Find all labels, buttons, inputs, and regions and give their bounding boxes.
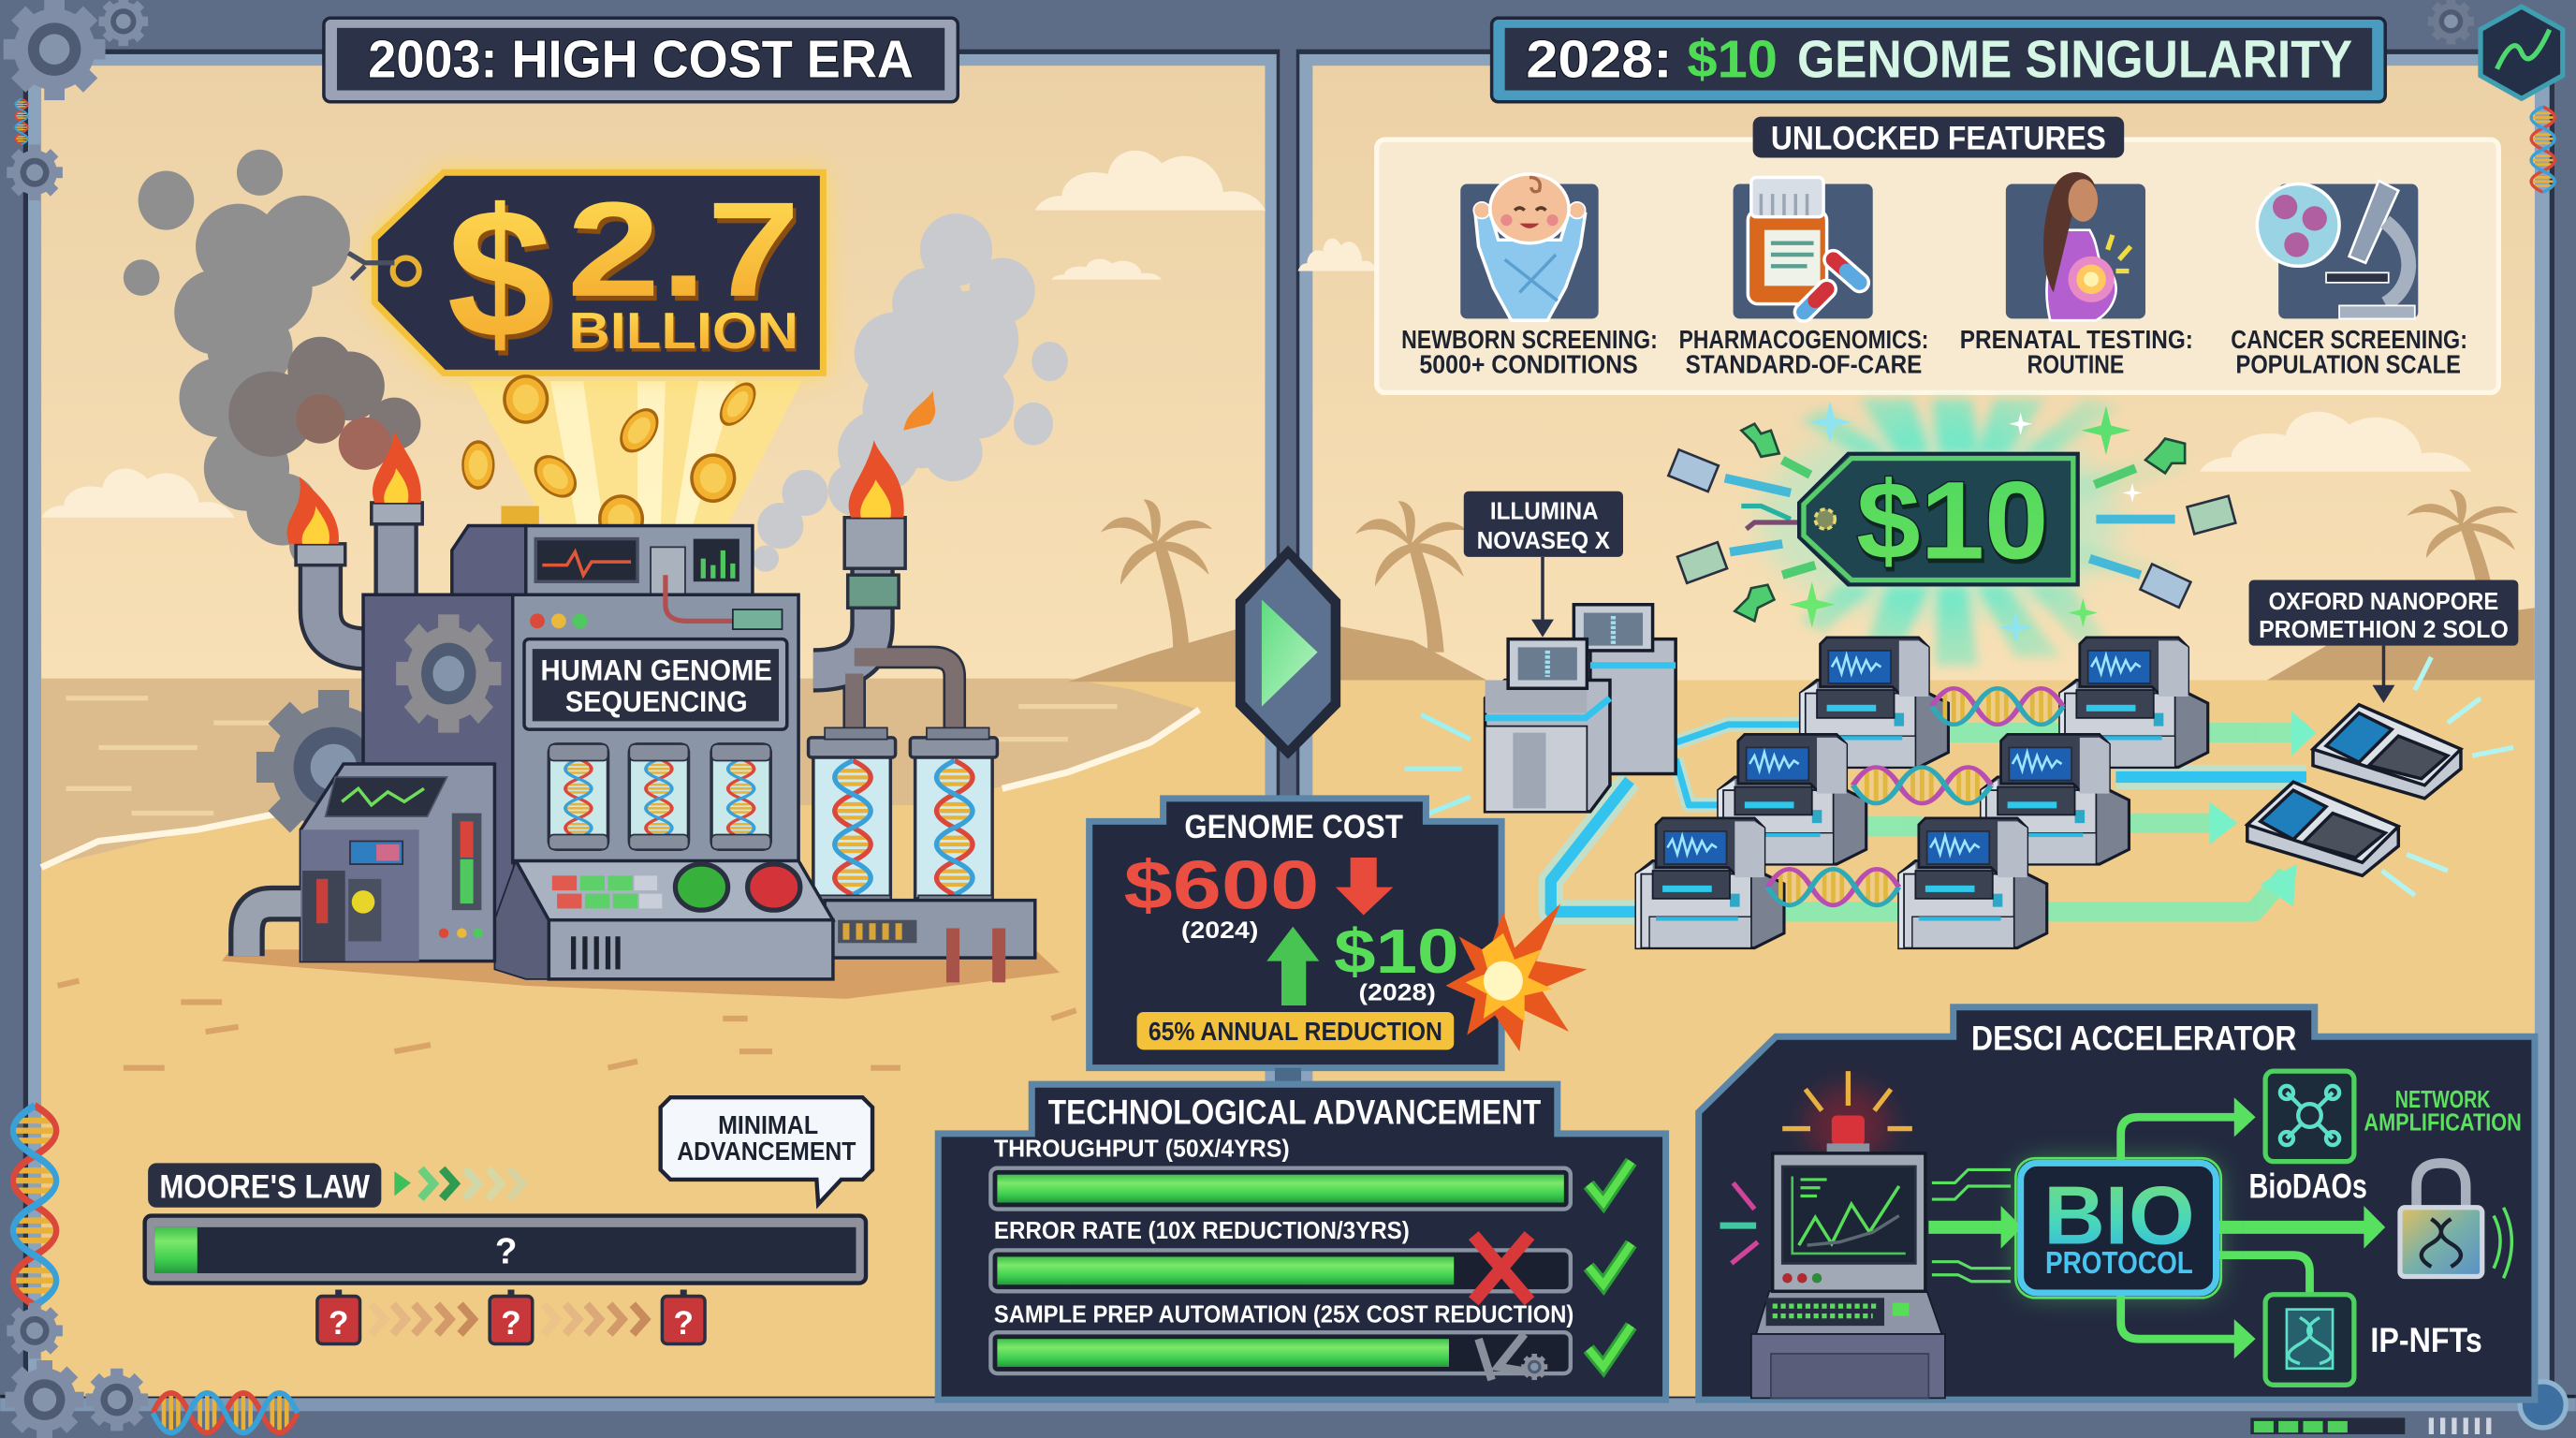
panel: unlocked features: CANCER SCREENING: <box>2231 325 2467 354</box>
network arrowheads <box>2001 1097 2385 1358</box>
row: throughput <box>990 1134 1632 1210</box>
tag ring <box>393 258 419 285</box>
up arrow <box>1266 927 1319 1005</box>
badge bottom-right <box>2520 1382 2566 1428</box>
panel: unlocked features <box>1377 117 2498 392</box>
moores law progress bar <box>145 1216 866 1284</box>
cloud left high <box>1035 151 1266 211</box>
machine label plate: HUMAN GENOME <box>541 653 772 686</box>
panel: 2028 beach scene background <box>1298 66 2535 1397</box>
palm tree center <box>1355 501 1467 653</box>
year 2024: (2024) <box>1181 918 1258 944</box>
speech bubble: minimal advancement: ADVANCEMENT <box>677 1137 856 1166</box>
green button <box>675 864 728 910</box>
panel: technological advancement <box>938 1084 1666 1400</box>
island <box>1068 621 1265 682</box>
network amplification text: AMPLIFICATION <box>2364 1109 2522 1136</box>
title: 2028 genome singularity: $10 <box>1687 29 1778 88</box>
ten dollars: $10 <box>1334 917 1459 987</box>
computer terminal <box>1751 1153 1945 1398</box>
left console <box>300 764 494 961</box>
falling coins <box>461 374 763 544</box>
reduction pill: 65% ANNUAL REDUCTION <box>1149 1017 1442 1046</box>
label: oxford nanopore promethion <box>2249 580 2518 700</box>
icon: padlock <box>2400 1163 2511 1278</box>
title: 2028 genome singularity: GENOME SINGULARITY <box>1797 29 2352 88</box>
control deck <box>494 861 833 979</box>
bio protocol box: BIO <box>2043 1169 2195 1261</box>
vent <box>574 936 618 969</box>
title: 2003 high cost era: 2003: HIGH COST ERA <box>368 29 914 88</box>
connector under genome cost <box>1275 1068 1301 1088</box>
ground shadow <box>222 949 1060 999</box>
data chips <box>1668 449 2235 608</box>
chimney caps <box>296 544 345 565</box>
exhaust pipe <box>246 903 300 956</box>
gear top-left small <box>99 0 148 46</box>
streaks <box>1725 460 2175 575</box>
speech bubble: minimal advancement <box>661 1097 872 1204</box>
shore foam <box>41 710 1199 868</box>
panel: unlocked features: STANDARD-OF-CARE <box>1686 349 1922 378</box>
icon: microscope and petri dish <box>2257 181 2418 318</box>
title: 2003 high cost era <box>324 18 958 102</box>
left signal sparks <box>1732 1182 1758 1263</box>
palm tree left <box>1101 499 1212 651</box>
sparkles <box>1808 401 1852 444</box>
right base unit <box>825 901 1035 982</box>
label: oxford nanopore promethion: PROMETHION 2 SOLO <box>2259 615 2509 643</box>
icon: pregnant woman <box>2006 172 2145 320</box>
alarm light <box>1782 1071 1912 1165</box>
cloud right upper <box>1298 239 1377 271</box>
side gear <box>396 614 501 733</box>
glow rays behind ten dollar tag <box>1668 398 2235 666</box>
icon: ip-nft card <box>2265 1295 2354 1385</box>
badge top-right <box>2481 7 2563 98</box>
gear bottom-left 3 <box>85 1369 148 1431</box>
network amplification text: NETWORK <box>2395 1087 2491 1113</box>
status bar bottom-right <box>2250 1417 2489 1434</box>
panel: unlocked features: PHARMACOGENOMICS: <box>1679 325 1928 354</box>
cloud left low <box>41 468 234 518</box>
moores law chevrons <box>394 1169 522 1198</box>
year 2028: (2028) <box>1358 981 1436 1006</box>
question mark tags with chevrons <box>317 1290 705 1343</box>
explosion burst <box>1445 903 1587 1051</box>
panel: unlocked features: POPULATION SCALE <box>2236 349 2461 378</box>
back pipes <box>320 522 872 670</box>
billion word: BILLION <box>568 302 798 360</box>
moores law progress bar: ? <box>495 1231 517 1271</box>
center divider gem <box>1236 546 1340 759</box>
large DNA tubes <box>809 727 997 912</box>
title: 2028 genome singularity <box>1492 18 2385 102</box>
sand marks <box>58 981 1076 1068</box>
icon: pill bottle <box>1734 178 1873 318</box>
panel: 2003 beach scene background <box>41 66 1266 1397</box>
sequencer middle row <box>1719 734 2129 864</box>
icon: newborn <box>1460 174 1599 320</box>
row: sample prep automation: SAMPLE PREP AUTOMATION (25X COST REDUCTION) <box>994 1300 1573 1328</box>
row: throughput: THROUGHPUT (50X/4YRS) <box>994 1134 1290 1162</box>
panel: genome cost <box>1090 799 1501 1068</box>
panel: desci accelerator <box>1699 1007 2535 1400</box>
red button <box>748 864 800 910</box>
speech bubble: minimal advancement: MINIMAL <box>718 1110 818 1139</box>
icon: network biodaos <box>2265 1071 2354 1162</box>
DNA top-left accent <box>15 98 28 144</box>
machine label plate <box>524 639 787 729</box>
gear bottom-left 2 <box>5 1360 84 1438</box>
label: illumina novaseq x: ILLUMINA <box>1490 497 1599 525</box>
machine label plate: SEQUENCING <box>565 684 748 718</box>
data pipes network <box>1551 712 2317 912</box>
DNA bottom-left horizontal <box>153 1393 298 1432</box>
sequencer rear row <box>1801 638 2208 768</box>
row: error rate <box>990 1216 1632 1301</box>
panel: unlocked features: ROUTINE <box>2027 349 2124 378</box>
DNA top-right <box>2531 107 2554 192</box>
row: error rate: ERROR RATE (10X REDUCTION/3YRS) <box>994 1216 1410 1244</box>
label: oxford nanopore promethion: OXFORD NANOPORE <box>2269 587 2498 615</box>
cloud right middle <box>2200 412 2472 472</box>
machine top unit <box>452 526 753 594</box>
label: illumina novaseq x <box>1464 492 1623 634</box>
network amplification text <box>2364 1087 2522 1136</box>
gold glow rays <box>468 381 802 534</box>
reduction pill <box>1137 1012 1454 1049</box>
moores law label: MOORE'S LAW <box>159 1168 371 1205</box>
question mark tags with chevrons: ? <box>674 1305 694 1342</box>
row: sample prep automation <box>990 1300 1632 1380</box>
portable devices: promethion <box>2247 657 2513 895</box>
ip-nfts text: IP-NFTs <box>2370 1321 2482 1359</box>
network arrows <box>1928 1117 2365 1339</box>
2.7 figure: 2.7 <box>567 175 800 325</box>
feature label: UNLOCKED FEATURES <box>1771 121 2106 157</box>
sequencer front row <box>1636 818 2047 948</box>
small DNA tubes <box>549 744 770 849</box>
panel: unlocked features: PRENATAL TESTING: <box>1960 325 2193 354</box>
600 dollars: $600 <box>1124 845 1319 923</box>
question mark tags with chevrons: ? <box>329 1305 348 1342</box>
palm tree right <box>2407 490 2518 610</box>
heading: DESCI ACCELERATOR <box>1971 1019 2296 1057</box>
DNA left vertical <box>13 1106 56 1305</box>
panel: unlocked features: 5000+ CONDITIONS <box>1419 349 1638 378</box>
down arrow <box>1336 858 1393 915</box>
cloud left small <box>1051 259 1162 280</box>
price tag: ten dollars: $10 <box>1856 460 2048 582</box>
question mark tags with chevrons: ? <box>501 1305 521 1342</box>
price tag: ten dollars <box>1799 453 2078 585</box>
flames <box>287 391 935 544</box>
price tag: 2.7 billion <box>348 170 823 376</box>
gear bottom-left 1 <box>7 1303 63 1358</box>
smoke left <box>124 150 420 568</box>
sea streaks <box>66 698 1117 814</box>
feature captions: NEWBORN SCREENING: <box>1401 325 1658 354</box>
sparks around server <box>1405 714 1471 814</box>
machine body <box>363 594 514 923</box>
smoke right <box>753 213 1068 572</box>
bio protocol box <box>2015 1158 2221 1298</box>
biodaos text: BioDAOs <box>2249 1167 2367 1205</box>
heading: GENOME COST <box>1184 809 1403 845</box>
sequencing machine <box>222 391 1060 999</box>
gear top-left large <box>4 0 106 100</box>
bio protocol box: PROTOCOL <box>2045 1246 2193 1281</box>
sea band <box>41 679 1199 868</box>
gear left <box>7 144 63 200</box>
big gear rear <box>256 690 411 844</box>
inward arrows <box>1734 424 2185 621</box>
label: illumina novaseq x: NOVASEQ X <box>1477 526 1610 554</box>
gear top-right <box>2428 0 2474 44</box>
indicator lights <box>530 613 545 628</box>
dollar sign: $ <box>447 170 552 376</box>
heading: TECHNOLOGICAL ADVANCEMENT <box>1048 1093 1542 1131</box>
server towers: illumina novaseq x <box>1486 605 1676 812</box>
title: 2028 genome singularity: 2028: <box>1526 29 1673 88</box>
